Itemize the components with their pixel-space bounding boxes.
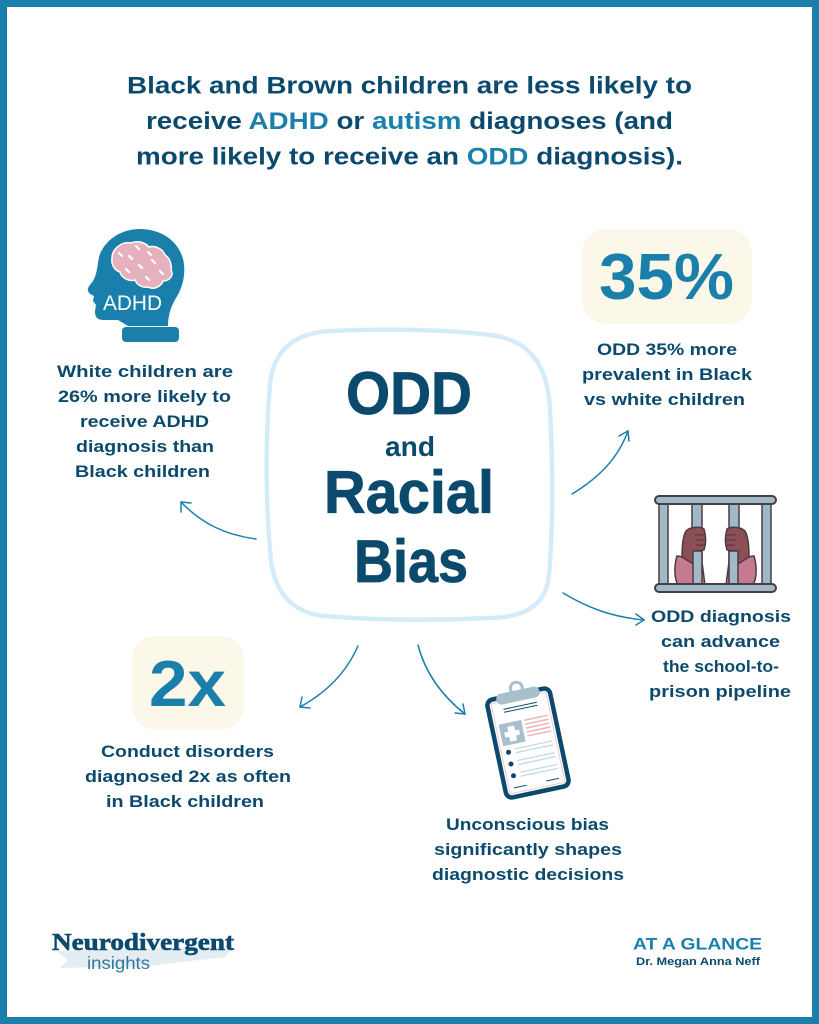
arrow: to 2x statistic — [300, 646, 358, 708]
text: ODD prevalence: prevalent in Black — [582, 365, 753, 384]
text: ADHD statistic: diagnosis than — [76, 437, 214, 456]
central heading: and — [385, 431, 435, 462]
text: ADHD statistic: Black children — [75, 462, 210, 481]
arrow: to unconscious bias — [418, 645, 465, 714]
text: unconscious bias: Unconscious bias — [446, 815, 609, 834]
icon: ADHD head: ADHD — [103, 292, 162, 315]
logo: Neurodivergent Insights: Neurodivergent — [52, 930, 234, 956]
stat badge: 35% — [582, 229, 752, 324]
central heading — [324, 360, 494, 595]
text: school-to-prison pipeline — [649, 607, 791, 701]
text: ODD prevalence — [582, 340, 753, 409]
stat badge: 2x — [132, 636, 244, 730]
credit: at a glance — [633, 934, 762, 968]
text: conduct disorders: in Black children — [106, 792, 264, 811]
text: ADHD statistic: White children are — [57, 362, 233, 381]
title: Black and Brown children are less likely to — [127, 72, 692, 100]
text: ODD prevalence: vs white children — [584, 390, 745, 409]
text: ADHD statistic: 26% more likely to — [58, 387, 231, 406]
arrow: to pipeline — [563, 593, 644, 625]
text: unconscious bias: significantly shapes — [434, 840, 622, 859]
title: more likely to receive an ODD diagnosis). — [136, 144, 683, 170]
panel: central title box — [267, 330, 552, 620]
text: ODD prevalence: ODD 35% more — [597, 340, 737, 359]
logo: Neurodivergent Insights — [52, 930, 234, 973]
text: conduct disorders: diagnosed 2x as often — [85, 767, 291, 786]
credit: at a glance: AT A GLANCE — [633, 934, 762, 954]
arrow: to ADHD statistic — [181, 502, 256, 539]
text: unconscious bias: diagnostic decisions — [432, 865, 624, 884]
title: receive ADHD or autism diagnoses (and — [146, 108, 673, 135]
text: school-to-prison pipeline: can advance — [661, 632, 780, 651]
central heading: Bias — [354, 528, 468, 595]
icon: prison bars with hands — [655, 496, 776, 592]
text: school-to-prison pipeline: prison pipeline — [649, 682, 791, 701]
text: unconscious bias — [432, 815, 624, 884]
text: conduct disorders: Conduct disorders — [101, 742, 274, 761]
icon: ADHD head — [88, 229, 184, 342]
text: ADHD statistic: receive ADHD — [80, 412, 209, 431]
logo: Neurodivergent Insights: insights — [87, 953, 150, 973]
text: ADHD statistic — [57, 362, 233, 481]
text: school-to-prison pipeline: ODD diagnosis — [651, 607, 791, 626]
icon: clipboard — [484, 676, 570, 799]
central heading: Racial — [324, 459, 494, 526]
credit: at a glance: Dr. Megan Anna Neff — [636, 956, 760, 968]
arrow: to 35% statistic — [572, 431, 629, 494]
text: conduct disorders — [85, 742, 291, 811]
title — [127, 72, 692, 170]
central heading: ODD — [346, 360, 472, 427]
text: school-to-prison pipeline: the school-to- — [663, 657, 779, 676]
stat badge: 35%: 35% — [599, 240, 734, 313]
stat badge: 2x: 2x — [149, 647, 226, 720]
